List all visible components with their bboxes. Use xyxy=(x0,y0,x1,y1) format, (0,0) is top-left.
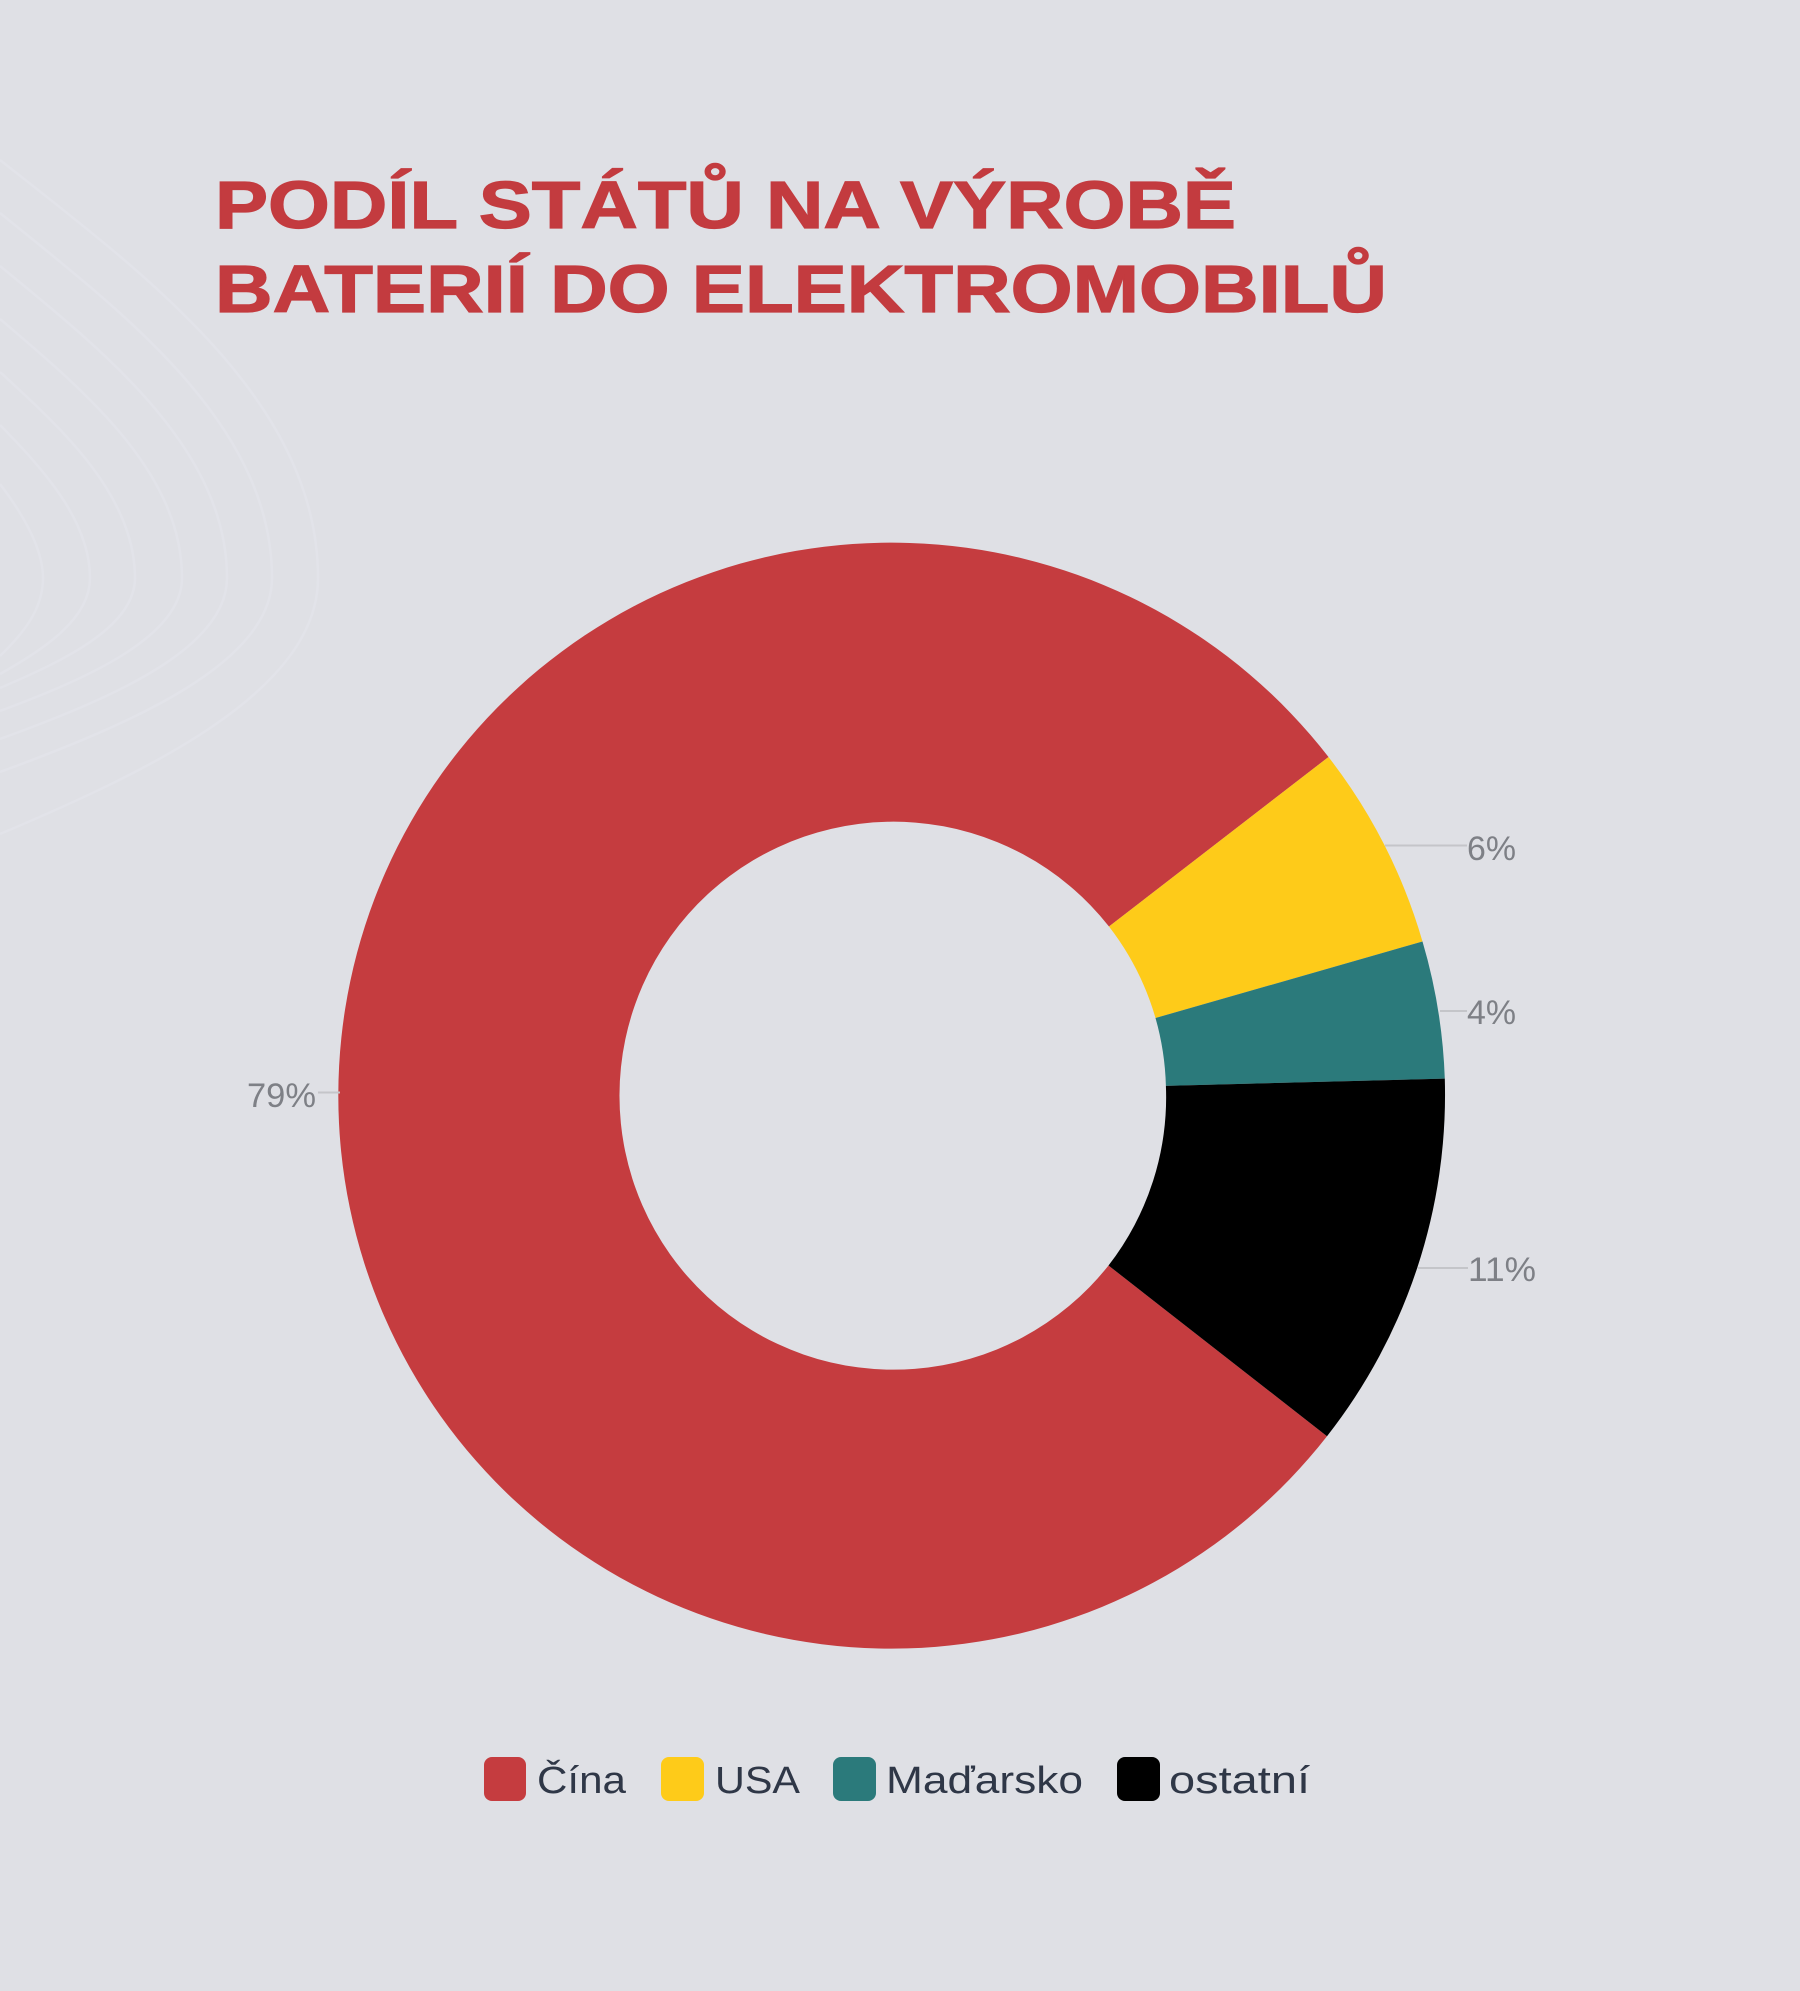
background contour lines xyxy=(0,160,318,834)
legend item: Maďarsko: Maďarsko xyxy=(886,1760,1083,1802)
legend item: USA xyxy=(661,1757,801,1802)
segment: USA 6% xyxy=(1109,757,1422,1018)
legend item: Čína xyxy=(484,1757,627,1802)
data label: 4%: 4% xyxy=(1467,994,1516,1032)
segment: ostatní 11% xyxy=(1108,1079,1445,1436)
legend item: ostatní xyxy=(1117,1757,1311,1802)
data label: 11% xyxy=(1418,1251,1536,1289)
data label: 6% xyxy=(1385,830,1516,868)
title: PODÍL STÁTŮ NA VÝROBĚ xyxy=(215,163,1236,243)
segment: Maďarsko 4% xyxy=(1156,942,1445,1086)
segment: Čína 79% xyxy=(338,543,1328,1649)
data label: 79%: 79% xyxy=(247,1077,316,1115)
legend item: ostatní: ostatní xyxy=(1169,1760,1311,1802)
legend item: USA: USA xyxy=(715,1760,801,1802)
legend item: Maďarsko xyxy=(833,1757,1083,1802)
data label: 4% xyxy=(1440,994,1516,1032)
data label: 11%: 11% xyxy=(1468,1251,1536,1289)
donut chart xyxy=(338,543,1445,1649)
title xyxy=(215,163,1387,327)
title: BATERIÍ DO ELEKTROMOBILŮ xyxy=(215,247,1387,327)
legend xyxy=(484,1757,1311,1802)
legend item: Čína: Čína xyxy=(537,1758,627,1802)
data label: 6%: 6% xyxy=(1467,830,1516,868)
